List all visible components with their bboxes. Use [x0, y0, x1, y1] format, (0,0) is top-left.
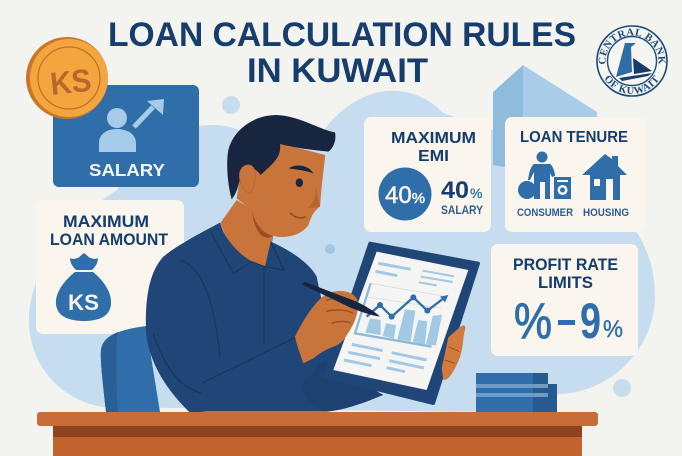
icon: central bank seal: OF KUWAIT [605, 75, 659, 94]
icon: money bag: KS [68, 290, 99, 315]
right hand [442, 325, 465, 380]
rate values: % [603, 316, 623, 343]
line chart [355, 283, 448, 347]
panel: maximum loan amount [36, 200, 184, 334]
panel: profit rate limits [491, 244, 638, 356]
heading: MAXIMUM [391, 130, 476, 147]
icon: central bank seal [596, 25, 668, 97]
heading: LOAN TENURE [520, 129, 628, 146]
labels [517, 207, 629, 219]
title: IN KUWAIT [247, 52, 428, 90]
icon: KS coin: KS [48, 62, 93, 102]
icon: KS coin [26, 37, 108, 119]
40% of salary: SALARY [441, 203, 483, 217]
tablet [325, 243, 478, 403]
labels: HOUSING [583, 207, 629, 219]
panel: maximum EMI [364, 117, 491, 232]
labels: CONSUMER [517, 207, 573, 219]
decorative circle [325, 244, 335, 254]
left hand [295, 291, 358, 363]
heading [50, 213, 168, 249]
icon: building [493, 65, 597, 170]
heading: EMI [418, 148, 449, 165]
decorative circle [613, 379, 631, 397]
title: LOAN CALCULATION RULES [108, 16, 576, 54]
face [289, 166, 320, 218]
hair [227, 115, 335, 199]
heading [391, 130, 476, 165]
40% of salary: % [470, 185, 482, 201]
heading: MAXIMUM [63, 213, 149, 231]
panel: loan tenure [505, 117, 645, 232]
ear [239, 165, 255, 193]
neck [220, 200, 273, 268]
icon: house [582, 154, 627, 200]
icon: consumer [518, 152, 571, 199]
rate values: 9 [580, 293, 601, 349]
decorative circle [222, 96, 240, 114]
40% circle: 40% [385, 182, 425, 209]
40% of salary [441, 177, 483, 217]
icon: money bag [56, 253, 111, 321]
chair [101, 326, 160, 412]
heading [513, 256, 618, 292]
heading: LIMITS [538, 274, 593, 292]
icon: central bank seal: CENTRAL BANK [598, 28, 666, 64]
40% of salary: 40 [441, 177, 469, 204]
pen [302, 282, 380, 317]
head [237, 143, 325, 237]
desk [37, 412, 598, 456]
man with tablet [146, 115, 478, 413]
books [476, 373, 557, 412]
tablet text lines [344, 263, 454, 372]
title [108, 16, 576, 90]
rate values: % [514, 293, 552, 349]
salary label: SALARY [89, 160, 165, 180]
heading: LOAN AMOUNT [50, 231, 168, 249]
shirt [146, 223, 383, 413]
rate values [514, 293, 623, 349]
heading: PROFIT RATE [513, 256, 618, 274]
panel: salary [53, 85, 199, 187]
icon: person with up arrow [99, 99, 164, 152]
